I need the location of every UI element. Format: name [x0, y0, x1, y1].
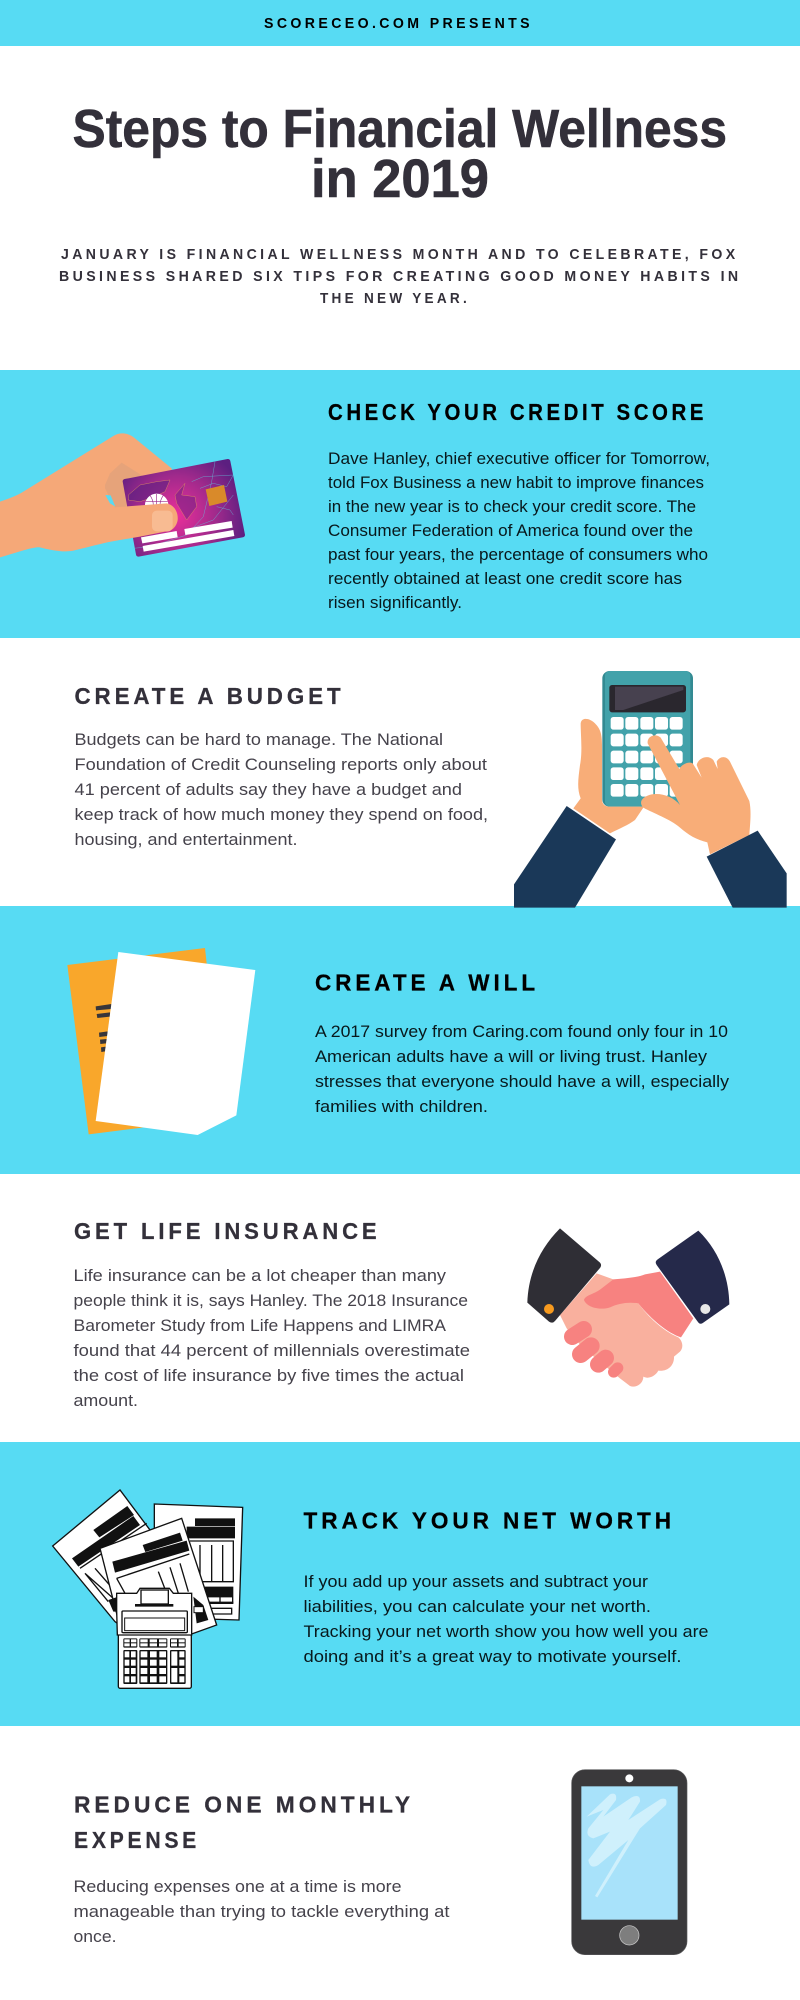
top banner — [0, 0, 800, 46]
heading: reduce one monthly expense: REDUCE ONE MONTHLY — [74, 1792, 414, 1818]
text: life insurance body: people think it is, says Hanley. The 2018 Insurance — [74, 1292, 468, 1310]
panel: reduce one monthly expense — [74, 1770, 687, 1955]
text: will body: American adults have a will or living trust. Hanley — [315, 1048, 708, 1066]
title: Steps to Financial Wellness — [72, 99, 727, 159]
text: budget body — [74, 731, 488, 849]
text: budget body: keep track of how much money they spend on food, — [74, 806, 488, 824]
icon: handshake — [527, 1228, 729, 1387]
text: reduce expense body: once. — [74, 1928, 116, 1946]
title — [72, 99, 727, 209]
heading: check your credit score: CHECK YOUR CREDIT SCORE — [328, 399, 707, 425]
heading: create a will: CREATE A WILL — [315, 970, 539, 996]
intro text: THE NEW YEAR. — [320, 291, 470, 307]
icon: smartphone — [572, 1770, 687, 1955]
panel: create a budget — [74, 683, 488, 849]
text: credit score body: Dave Hanley, chief executive officer for Tomorrow, — [328, 450, 710, 468]
icon: documents — [67, 948, 255, 1135]
text: life insurance body: Life insurance can be a lot cheaper than many — [74, 1267, 447, 1285]
text: reduce expense body: manageable than trying to tackle everything at — [74, 1903, 450, 1921]
icon: papers and adding machine — [53, 1490, 243, 1688]
text: life insurance body: found that 44 percent of millennials overestimate — [74, 1342, 470, 1360]
text: credit score body: risen significantly. — [328, 594, 462, 612]
text: reduce expense body: Reducing expenses one at a time is more — [74, 1878, 402, 1896]
heading: track your net worth: TRACK YOUR NET WORTH — [304, 1508, 675, 1534]
text: budget body: Foundation of Credit Counseling reports only about — [74, 756, 487, 774]
text: net worth body: If you add up your assets and subtract your — [304, 1573, 649, 1591]
text: credit score body: past four years, the percentage of consumers who — [328, 546, 708, 564]
panel: get life insurance — [74, 1218, 729, 1410]
top banner: SCORECEO.COM PRESENTS — [264, 16, 533, 32]
text: budget body: housing, and entertainment. — [74, 831, 298, 849]
text: will body — [315, 1023, 730, 1116]
text: life insurance body: the cost of life insurance by five times the actual — [74, 1367, 464, 1385]
intro text: BUSINESS SHARED SIX TIPS FOR CREATING GOOD MONEY HABITS IN — [59, 269, 742, 285]
text: credit score body — [328, 450, 710, 612]
panel: check your credit score — [0, 370, 800, 638]
intro text: JANUARY IS FINANCIAL WELLNESS MONTH AND TO CELEBRATE, FOX — [61, 247, 738, 263]
text: life insurance body: amount. — [74, 1392, 138, 1410]
text: net worth body: Tracking your net worth show you how well you are — [304, 1623, 708, 1641]
text: life insurance body: Barometer Study from Life Happens and LIMRA — [74, 1317, 446, 1335]
heading: get life insurance: GET LIFE INSURANCE — [74, 1218, 380, 1244]
icon: hands holding calculator — [514, 671, 787, 908]
icon: hand holding credit card — [0, 433, 243, 557]
panel: track your net worth — [0, 1442, 800, 1726]
text: credit score body: Consumer Federation of America found over the — [328, 522, 693, 540]
text: budget body: Budgets can be hard to manage. The National — [74, 731, 443, 749]
heading: create a budget: CREATE A BUDGET — [74, 683, 344, 709]
text: credit score body: told Fox Business a new habit to improve finances — [328, 474, 704, 492]
intro text — [59, 247, 742, 307]
heading: reduce one monthly expense — [74, 1792, 414, 1853]
heading: reduce one monthly expense: EXPENSE — [74, 1827, 200, 1853]
text: net worth body: doing and it’s a great way to motivate yourself. — [304, 1648, 682, 1666]
text: will body: families with children. — [315, 1098, 488, 1116]
text: net worth body: liabilities, you can calculate your net worth. — [304, 1598, 651, 1616]
text: credit score body: in the new year is to check your credit score. The — [328, 498, 696, 516]
text: credit score body: recently obtained at least one credit score has — [328, 570, 682, 588]
text: will body: stresses that everyone should have a will, especially — [315, 1073, 730, 1091]
title: in 2019 — [311, 149, 489, 209]
text: will body: A 2017 survey from Caring.com found only four in 10 — [315, 1023, 728, 1041]
text: life insurance body — [74, 1267, 470, 1410]
text: budget body: 41 percent of adults say they have a budget and — [74, 781, 462, 799]
panel: create a will — [0, 906, 800, 1174]
text: reduce expense body — [74, 1878, 450, 1946]
text: net worth body — [304, 1573, 708, 1666]
